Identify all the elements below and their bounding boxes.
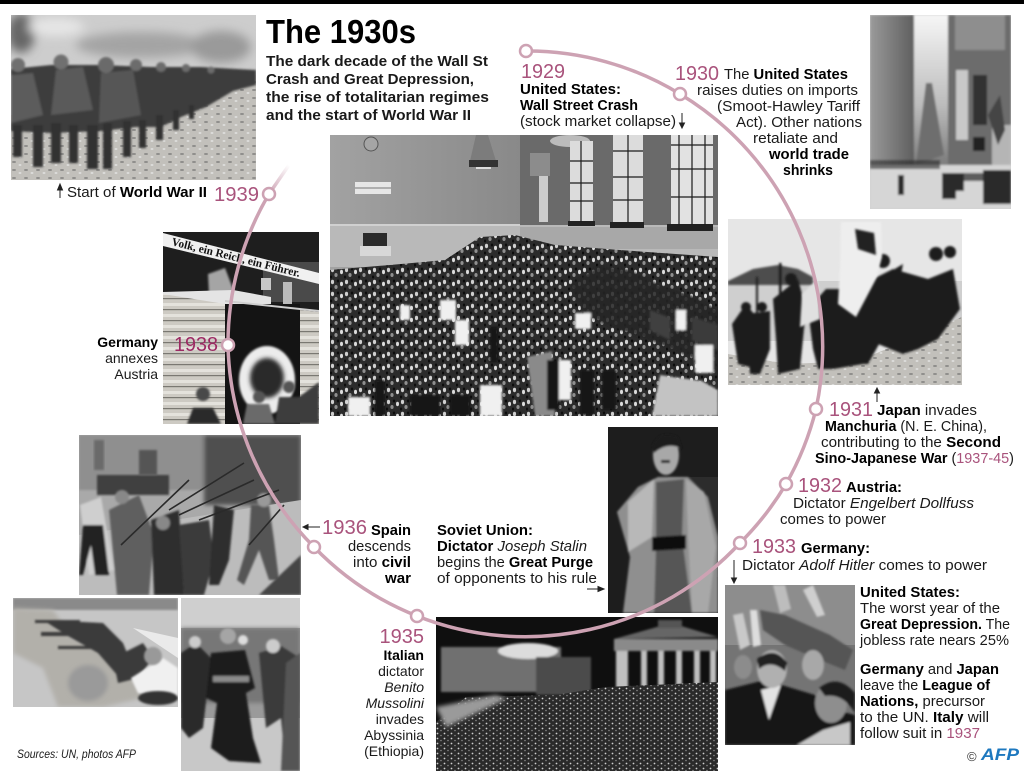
1938 entry: 1938 [174, 334, 218, 356]
emblem disc [239, 346, 295, 414]
1936 entry: into civil [353, 555, 411, 571]
1932 entry: Dictator Engelbert Dollfuss [793, 496, 974, 512]
1930 entry: (Smoot-Hawley Tariff [717, 99, 861, 115]
timeline arc [228, 51, 823, 637]
1935 entry: 1935 [380, 626, 424, 648]
1933 League of Nations note: to the UN. Italy will [860, 710, 989, 726]
officers and guard [187, 381, 319, 424]
1933 entry: Germany: [801, 541, 870, 557]
1938 entry: annexes [105, 350, 158, 366]
photo: soldiers marching, start of World War II [11, 15, 256, 180]
photo: militia behind rocks [13, 598, 178, 707]
1930 entry: The United States [724, 67, 848, 83]
1931 entry: 1931 [829, 399, 873, 421]
arrow: up to Japan photo [874, 388, 880, 402]
1933 United States note: jobless rate nears 25% [859, 633, 1009, 649]
1930 entry: 1930 [675, 63, 719, 85]
photo: Hitler portrait [608, 427, 718, 613]
sources: Sources: UN, photos AFP [17, 749, 136, 761]
Soviet Union entry: Soviet Union: [437, 523, 533, 539]
1938 entry: Austria [114, 366, 158, 382]
arrow: left to Spain photo [303, 524, 320, 530]
1930 entry [675, 63, 862, 179]
1939 entry: 1939 [214, 184, 259, 206]
1936 entry: descends [348, 539, 411, 555]
1933 League of Nations note [860, 662, 999, 742]
1933 United States note: United States: [860, 585, 960, 601]
1939 entry [67, 184, 259, 206]
1932 entry: Austria: [846, 480, 902, 496]
1931 entry: Manchuria (N. E. China), [825, 419, 987, 435]
photo: Vienna rally platform with banner: Volk, ein Reich, ein Führer. [170, 236, 301, 280]
copyright AFP logo [967, 745, 1020, 764]
subtitle: The dark decade of the Wall St [266, 54, 488, 70]
1933 entry: Dictator Adolf Hitler comes to power [742, 558, 987, 574]
subtitle [266, 54, 489, 124]
timeline nodes [222, 45, 822, 622]
1933 entry [742, 536, 987, 574]
copyright AFP logo: AFP [980, 745, 1020, 764]
1935 entry: Abyssinia [364, 727, 424, 743]
1933 League of Nations note: Germany and Japan [860, 662, 999, 678]
1929 entry: United States: [520, 82, 621, 98]
1930 entry: Act). Other nations [736, 115, 862, 131]
sign, clock and chandeliers [355, 135, 590, 194]
1929 entry: (stock market collapse) [520, 114, 676, 130]
flag [838, 222, 882, 317]
1930 entry: shrinks [783, 163, 833, 179]
1931 entry: Japan invades [877, 403, 977, 419]
1935 entry: Benito [384, 679, 424, 695]
photo: torchlight parade at the Brandenburg Gate [436, 617, 718, 771]
1938 entry: Germany [97, 334, 158, 350]
photo: militia woman in the crowd [181, 598, 300, 771]
subtitle: the rise of totalitarian regimes [266, 90, 489, 106]
1930 entry: retaliate and [753, 131, 838, 147]
1933 United States note [859, 585, 1010, 649]
Soviet Union entry: begins the Great Purge [437, 555, 593, 571]
1930 entry: raises duties on imports [697, 83, 858, 99]
1936 entry: Spain [371, 523, 411, 539]
photo: Japanese troops in Manchuria [728, 219, 962, 385]
1932 entry: 1932 [798, 475, 842, 497]
1929 entry: Wall Street Crash [520, 98, 638, 114]
crowd on the floor [330, 235, 718, 416]
1933 League of Nations note: follow suit in 1937 [860, 726, 980, 742]
photo: Vienna rally platform with banner [163, 232, 319, 424]
photo: Wall Street looking toward Trinity Church [870, 15, 1011, 209]
Soviet Union entry: Dictator Joseph Stalin [437, 539, 587, 555]
1933 League of Nations note: leave the League of [860, 678, 990, 694]
tall windows [530, 135, 713, 231]
photo: stock exchange trading floor [330, 135, 718, 416]
1936 entry: war [384, 571, 411, 587]
1930 entry: world trade [768, 147, 849, 163]
1932 entry [780, 475, 974, 528]
top black bar [0, 0, 1024, 4]
1933 United States note: The worst year of the [860, 601, 1000, 617]
title: The 1930s [266, 13, 416, 50]
1936 entry: 1936 [322, 517, 367, 539]
subtitle: and the start of World War II [266, 108, 471, 124]
1933 entry: 1933 [752, 536, 796, 558]
arrow: up to soldiers photo [58, 184, 62, 198]
Soviet Union entry [437, 523, 597, 587]
1931 entry [815, 399, 1014, 467]
arrow: down to rally photo [732, 560, 736, 583]
1935 entry: Italian [384, 647, 424, 663]
arrow: down to trading floor photo [680, 113, 684, 128]
1935 entry: invades [376, 711, 424, 727]
1933 League of Nations note: Nations, precursor [860, 694, 985, 710]
1935 entry: (Ethiopia) [364, 743, 424, 759]
1938 entry [97, 334, 218, 382]
1935 entry: dictator [378, 663, 424, 679]
1929 entry [520, 61, 676, 130]
1935 entry: Mussolini [366, 695, 425, 711]
subtitle: Crash and Great Depression, [266, 72, 474, 88]
1931 entry: contributing to the Second [821, 435, 1001, 451]
1932 entry: comes to power [780, 512, 886, 528]
Soviet Union entry: of opponents to his rule [437, 571, 597, 587]
1936 entry [322, 517, 411, 587]
copyright AFP logo: © [967, 749, 977, 764]
1933 United States note: Great Depression. The [860, 617, 1010, 633]
photo: Spanish Civil War militia firing rifles [79, 435, 301, 595]
1929 entry: 1929 [521, 61, 565, 83]
1939 entry: Start of World War II [67, 185, 207, 201]
photo: Hitler and Goebbels at a rally [725, 585, 855, 745]
1935 entry [364, 626, 425, 759]
arrow: right to portrait photo [587, 586, 604, 592]
1931 entry: Sino-Japanese War (1937-45) [815, 451, 1014, 467]
